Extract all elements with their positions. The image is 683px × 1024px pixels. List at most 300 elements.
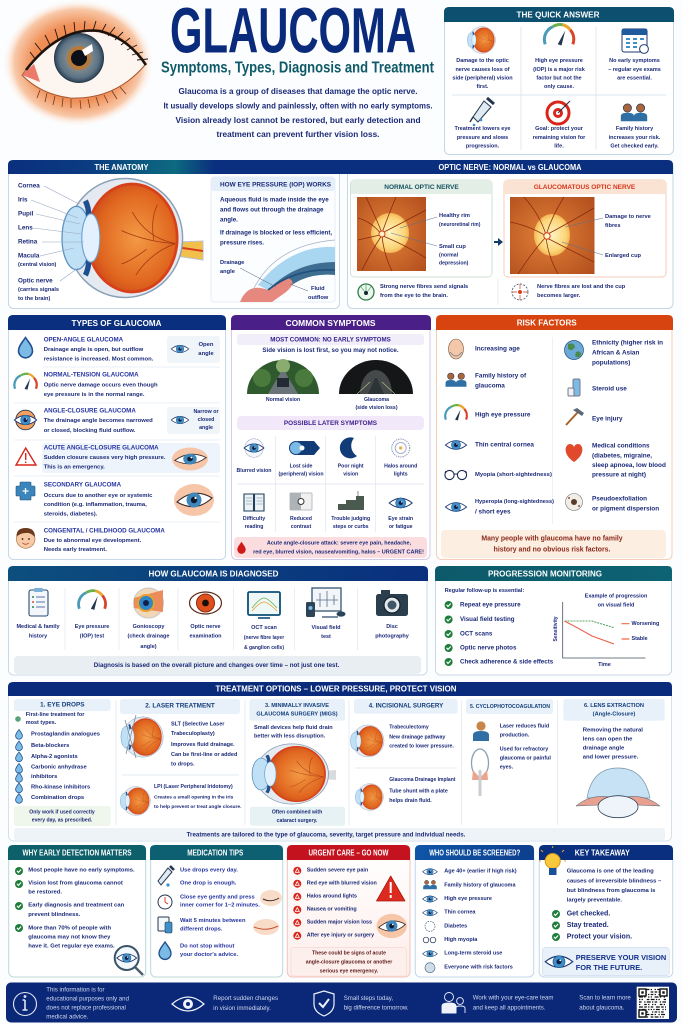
fundus photo: glaucoma — [510, 197, 594, 274]
icon: eye cross-section — [467, 27, 495, 53]
icon: dropper — [158, 866, 174, 887]
type: angle-closure: closed — [198, 417, 214, 423]
icon: medical history clipboard — [29, 588, 48, 616]
icon: lower eyelid — [253, 919, 279, 935]
treatment 3: MIGS: Often combined with — [272, 810, 322, 816]
treatment 1: eye drops: Alpha-2 agonists — [31, 754, 78, 760]
anatomy labels: (central vision) — [18, 262, 57, 268]
treatment 2: laser treatment: LPI (Laser Peripheral Iridotomy) — [154, 784, 233, 790]
symptom: blurred vision — [237, 439, 271, 474]
panel: why early detection matters: Early diagnosis and treatment can — [28, 903, 125, 909]
type: angle-closure: or closed, blocking fluid outflow. — [44, 428, 136, 434]
icon: eye outline — [172, 997, 204, 1011]
callout: preserve your vision: FOR THE FUTURE. — [576, 963, 642, 972]
panel: glaucomatous optic nerve: Enlarged cup — [605, 253, 642, 259]
panel: types of glaucoma: TYPES OF GLAUCOMA — [72, 318, 162, 328]
line chart: visual field progression: on visual field — [598, 603, 634, 609]
panel: medication tips: MEDICATION TIPS — [187, 848, 243, 858]
risk: high pressure: High eye pressure — [475, 412, 531, 418]
panel: key takeaway: largely preventable. — [567, 898, 622, 904]
panel: normal optic nerve: NORMAL OPTIC NERVE — [384, 184, 459, 191]
icon: family group — [621, 104, 647, 121]
footer disclaimer — [46, 986, 129, 1020]
footer disclaimer: does not replace professional — [46, 1004, 126, 1012]
panel: medication tips: Close eye gently and press — [180, 894, 255, 900]
optic nerve captions: Strong nerve fibres send signals — [380, 284, 468, 290]
footer report text: in vision immediately. — [213, 1005, 271, 1012]
footer small steps text: Small steps today, — [344, 995, 393, 1002]
quick answer text: bottom row: Treatment lowers eye — [455, 126, 510, 132]
treatment 1: eye drops: Only work if used correctly — [29, 809, 95, 815]
symptom: reduced contrast — [290, 493, 312, 530]
type: open-angle: Open — [198, 342, 214, 348]
risk: age — [448, 339, 520, 359]
treatment 4: incisional surgery: Trabeculectomy — [389, 724, 429, 730]
risk: high pressure — [445, 405, 531, 421]
symptom: lost side vision: (peripheral) vision — [279, 472, 323, 478]
symptom: poor night vision: vision — [343, 472, 358, 478]
optic nerve captions: becomes larger. — [537, 293, 581, 299]
risk: ethnicity — [564, 340, 663, 366]
treatment note — [14, 828, 665, 841]
type: secondary: steroids, diabetes). — [44, 512, 98, 518]
intro text: It usually develops slowly and painlessly, often with no early symptoms. — [164, 100, 432, 110]
panel: who should be screened: Age 40+ (earlier if high risk) — [444, 869, 517, 875]
icon: red eye — [376, 914, 407, 938]
quick answer text: bottom row: Goal: protect your — [535, 126, 584, 132]
treatment 2: laser treatment: to drops. — [171, 762, 195, 768]
type: acute angle-closure: ACUTE ANGLE-CLOSURE GLAUCOMA — [44, 444, 159, 452]
diagnosis labels: (check drainage — [128, 634, 169, 640]
panel: the quick answer: THE QUICK ANSWER — [516, 10, 600, 20]
risk: medical conditions: pressure at night) — [592, 472, 646, 478]
intro text: treatment can prevent further vision loss. — [216, 129, 380, 139]
symptom: halos: Halos around — [384, 464, 417, 470]
treatment 5: cyclophotocoagulation: 5. CYCLOPHOTOCOAGULATION — [470, 704, 550, 710]
anatomy labels: Macula — [18, 252, 40, 260]
treatment 1: eye drops: inhibitors — [31, 774, 57, 780]
treatment 4: incisional surgery: Tube shunt with a plate — [389, 789, 448, 795]
panel: why early detection matters: Vision lost from glaucoma cannot — [28, 881, 123, 887]
highlight: acute entry — [42, 443, 220, 473]
treatment 1: eye drops: Beta-blockers — [31, 743, 69, 749]
quick answer text: top row: – regular eye exams — [608, 67, 661, 73]
footer scan text: about glaucoma. — [579, 1004, 625, 1012]
type: normal-tension: eye pressure is in the normal range. — [44, 392, 145, 398]
checklist: Optic nerve photos — [460, 644, 517, 652]
panel: progression monitoring — [435, 566, 672, 675]
treatment note: Treatments are tailored to the type of glaucoma, severity, target pressure and individual needs. — [187, 832, 466, 838]
panel: medication tips: One drop is enough. — [180, 881, 237, 887]
treatment 5: cyclophotocoagulation: production. — [500, 732, 530, 738]
treatment 3: MIGS: Small devices help fluid drain — [254, 725, 333, 731]
panel: key takeaway: Stay treated. — [567, 922, 609, 929]
panel: common symptoms — [231, 315, 431, 560]
treatment 2: laser treatment — [120, 699, 242, 815]
icon: information — [14, 992, 36, 1016]
checklist: OCT scans — [460, 630, 493, 638]
icon: eye-care team — [442, 992, 465, 1013]
panel: how eye pressure works: Fluid — [311, 286, 325, 292]
type: acute angle-closure: Sudden closure causes very high pressure. — [44, 455, 166, 461]
type: open-angle: resistance is increased. Most common. — [44, 356, 154, 362]
icon: drop — [159, 942, 171, 959]
risk: ethnicity: African & Asian — [592, 350, 639, 356]
footer team text: Work with your eye-care team — [473, 994, 554, 1002]
panel: common symptoms: Side vision is lost first, so you may not notice. — [262, 347, 399, 354]
icon: camera — [376, 590, 408, 616]
risk: hyperopia — [445, 499, 554, 516]
callout: urgent note: serious eye emergency. — [320, 968, 379, 974]
type: normal-tension — [14, 372, 158, 398]
quick answer text: top row: nerve causes loss of — [455, 67, 510, 73]
diagnosis labels: Visual field — [312, 625, 340, 631]
footer bar — [6, 982, 677, 1022]
quick answer text: top row: first. — [477, 84, 489, 90]
treatment 4: incisional surgery: 4. INCISIONAL SURGERY — [369, 702, 444, 710]
type: open-angle: Drainage angle is open, but outflow — [44, 347, 144, 353]
risk: pseudoexfoliation: or pigment dispersion — [592, 506, 659, 512]
quick answer text: top row: factor but not the — [536, 76, 582, 82]
icon: OCT scan — [248, 592, 280, 618]
treatment 1: eye drops: Combination drops — [31, 795, 84, 801]
symptom: trouble judging steps: Trouble judging — [331, 516, 370, 522]
risk: thin cornea — [445, 440, 534, 450]
panel: normal optic nerve: (neuroretinal rim) — [439, 222, 481, 228]
icon: optic nerve examination — [190, 592, 222, 614]
panel: key takeaway — [539, 845, 673, 977]
type: acute angle-closure: This is an emergency. — [44, 464, 105, 470]
diagnosis labels: angle) — [140, 644, 157, 650]
icon: clock — [158, 895, 172, 909]
panel: who should be screened: WHO SHOULD BE SCREENED? — [429, 848, 520, 858]
panel: anatomy frame and heading: THE ANATOMY — [94, 162, 149, 172]
quick answer text: top row: are essential. — [617, 76, 652, 82]
panel: how eye pressure works: angle. — [220, 216, 238, 224]
type: secondary — [16, 482, 214, 518]
icon: shield — [314, 991, 334, 1016]
anatomy labels: Retina — [18, 238, 38, 246]
panel: who should be screened — [415, 845, 534, 977]
symptom: halos — [384, 439, 417, 478]
anatomy labels: (carries signals — [18, 287, 59, 293]
treatment 1: eye drops: Carbonic anhydrase — [31, 765, 88, 771]
callout: urgent note: angle-closure glaucoma or another — [306, 959, 392, 965]
risk: ethnicity: populations) — [592, 360, 630, 366]
risk: steroid use: Steroid use — [592, 386, 627, 392]
panel: glaucomatous optic nerve: fibres — [605, 223, 620, 229]
icon: magnifier — [115, 946, 143, 975]
risk: ethnicity: Ethnicity (higher risk in — [592, 340, 663, 346]
panel: normal optic nerve: Healthy rim — [439, 213, 470, 219]
treatment 1: eye drops: 1. EYE DROPS — [40, 702, 85, 708]
footer small steps text — [344, 995, 409, 1012]
panel: medication tips: inner corner for 1–2 minutes. — [180, 903, 260, 909]
quick answer text: top row: (IOP) is a major risk — [533, 67, 586, 73]
treatment 3: MIGS — [249, 699, 345, 826]
type: angle-closure: ANGLE-CLOSURE GLAUCOMA — [44, 408, 136, 414]
panel: common symptoms: (side vision loss) — [355, 405, 398, 411]
callout: diagnosis summary — [14, 656, 421, 674]
panel: key takeaway: Glaucoma is one of the leading — [567, 868, 654, 874]
type: secondary: SECONDARY GLAUCOMA — [44, 482, 122, 488]
anatomy labels: Cornea — [18, 182, 40, 190]
panel: normal optic nerve: depression) — [439, 260, 469, 266]
optic nerve captions: from the eye to the brain. — [380, 293, 448, 299]
panel: how glaucoma is diagnosed: HOW GLAUCOMA IS DIAGNOSED — [148, 568, 278, 578]
panel: why early detection matters: have it. Get regular eye exams. — [28, 944, 115, 950]
treatment 5: cyclophotocoagulation: eyes. — [500, 765, 514, 771]
type: angle-closure — [14, 407, 220, 434]
panel: urgent care: Sudden severe eye pain — [307, 868, 368, 874]
type: acute angle-closure — [16, 444, 208, 471]
treatment 3: MIGS: GLAUCOMA SURGERY (MIGS) — [256, 712, 338, 718]
risk: family history — [446, 372, 527, 390]
quick answer text: bottom row: life. — [554, 144, 564, 150]
symptom: difficulty reading — [243, 494, 265, 530]
risk: eye injury — [566, 408, 623, 425]
treatment 2: laser treatment: to help prevent or treat angle closure. — [154, 804, 242, 810]
treatment 6: lens extraction — [563, 699, 665, 818]
panel: why early detection matters — [8, 845, 146, 977]
type: congenital — [16, 528, 165, 553]
treatment 4: incisional surgery: created to lower pressure. — [389, 743, 454, 749]
risk: family history: Family history of — [475, 372, 527, 380]
panel: urgent care: Sudden major vision loss — [307, 920, 372, 926]
panel: urgent care — [287, 845, 410, 977]
panel: urgent care: Red eye with blurred vision — [307, 881, 377, 887]
quick answer text: bottom row: remaining vision for — [533, 135, 586, 141]
anatomy labels: to the brain) — [18, 296, 50, 302]
icon: light bulb — [539, 846, 566, 875]
footer report text: Report sudden changes — [213, 995, 278, 1002]
panel: common symptoms: POSSIBLE LATER SYMPTOMS — [284, 420, 378, 427]
treatment 5: cyclophotocoagulation: Used for refractory — [500, 746, 548, 752]
risk: medical conditions: Medical conditions — [592, 442, 650, 450]
anatomy labels — [18, 182, 84, 302]
callout: acute attack — [234, 537, 427, 558]
panel: medication tips: Wait 5 minutes between — [180, 918, 246, 924]
type: open-angle: angle — [198, 351, 214, 357]
diagnosis labels: (IOP) test — [80, 634, 104, 640]
symptom: reduced contrast: Reduced — [290, 516, 312, 522]
quick answer text: bottom row — [455, 126, 661, 150]
diagnosis labels: test — [321, 634, 331, 640]
treatment 4: incisional surgery — [350, 699, 458, 810]
line chart: visual field progression: Example of progression — [585, 594, 648, 600]
diagnosis labels: Optic nerve — [190, 624, 221, 630]
diagnosis labels — [16, 624, 410, 651]
panel: anatomy frame and heading: OPTIC NERVE: NORMAL vs GLAUCOMA — [438, 162, 582, 172]
vision dome: glaucoma — [339, 360, 413, 394]
type: congenital: Due to abnormal eye development. — [44, 538, 142, 544]
risk: eye injury: Eye injury — [592, 416, 623, 422]
footer scan text — [579, 994, 631, 1012]
treatment 3: MIGS: cataract surgery. — [277, 818, 318, 824]
panel: who should be screened: High myopia — [444, 937, 478, 943]
symptom: lost side vision — [279, 441, 323, 478]
panel: glaucomatous optic nerve: Damage to nerve — [605, 214, 651, 220]
line chart: visual field progression: Sensitivity — [553, 616, 559, 642]
panel: common symptoms: Glaucoma — [364, 397, 389, 403]
footer disclaimer: medical advice. — [46, 1014, 89, 1020]
line chart: visual field progression — [553, 594, 659, 668]
panel: urgent care: After eye injury or surgery — [307, 933, 374, 939]
treatment 1: eye drops: most types. — [26, 720, 57, 726]
treatment 2: laser treatment: Trabeculoplasty) — [171, 731, 215, 737]
callout: diagnosis summary: Diagnosis is based on the overall picture and changes over time – not just one test. — [94, 662, 340, 669]
callout: no obvious risk factors: history and no obvious risk factors. — [494, 546, 610, 554]
panel: key takeaway: causes of irreversible blindness – — [567, 878, 662, 884]
quick answer text: bottom row: Family history — [616, 126, 654, 132]
panel: key takeaway: Protect your vision. — [567, 934, 632, 940]
treatment 5: cyclophotocoagulation: glaucoma or painful — [500, 756, 551, 762]
symptom: difficulty reading: Difficulty — [243, 516, 265, 522]
panel: treatment options — [8, 682, 672, 841]
type: normal-tension: NORMAL-TENSION GLAUCOMA — [44, 372, 139, 378]
checklist — [445, 601, 554, 666]
panel: types of glaucoma — [8, 315, 226, 560]
risk: medical conditions — [566, 442, 666, 478]
panel: key takeaway: KEY TAKEAWAY — [575, 848, 630, 858]
risk: medical conditions: (diabetes, migraine, — [592, 452, 652, 460]
intro text: Glaucoma is a group of diseases that damage the optic nerve. — [178, 86, 418, 96]
icon: strong nerve fibres — [358, 284, 374, 300]
intro text: Vision already lost cannot be restored, but early detection and — [176, 115, 420, 125]
treatment 1: eye drops: every day, as prescribed. — [32, 818, 93, 824]
panel: risk factors — [436, 315, 673, 560]
diagnosis labels: Gonioscopy — [133, 624, 165, 630]
symptom: eye strain: or fatigue — [389, 524, 413, 530]
panel: how eye pressure works: pressure rises. — [220, 240, 264, 246]
symptom: poor night vision — [338, 437, 364, 478]
panel: how eye pressure works: and flows out through the drainage — [220, 206, 324, 214]
panel: glaucomatous optic nerve: GLAUCOMATOUS OPTIC NERVE — [534, 184, 636, 191]
symptom: eye strain: Eye strain — [388, 516, 413, 522]
intro text — [164, 86, 432, 139]
symptom: reduced contrast: contrast — [291, 524, 312, 530]
quick answer text: top row: Damage to the optic — [456, 58, 509, 64]
line chart: visual field progression: Stable — [632, 636, 648, 642]
optic nerve captions — [358, 279, 626, 305]
panel: glaucomatous optic nerve — [504, 180, 666, 277]
symptom: lost side vision: Lost side — [290, 464, 312, 470]
diagnosis labels: examination — [189, 634, 222, 640]
risk: hyperopia: Hyperopia (long-sightedness) — [475, 499, 554, 505]
treatment 6: lens extraction: lens can open the — [583, 737, 633, 743]
panel: why early detection matters: prevent blindness. — [28, 912, 81, 918]
panel: medication tips: Do not stop without — [180, 943, 234, 949]
panel: who should be screened: Long-term steroid use — [444, 951, 502, 957]
symptom: trouble judging steps — [331, 491, 370, 530]
line chart: visual field progression: Worsening — [632, 621, 659, 627]
type: open-angle: OPEN-ANGLE GLAUCOMA — [44, 336, 124, 344]
treatment 6: lens extraction: Removing the natural — [583, 728, 643, 734]
diagnosis labels: photography — [375, 634, 410, 640]
diagnosis labels: Disc — [386, 624, 398, 630]
panel: urgent care: URGENT CARE – GO NOW — [308, 848, 389, 858]
type: congenital: CONGENITAL / CHILDHOOD GLAUCOMA — [44, 528, 165, 534]
type: secondary: Occurs due to another eye or systemic — [44, 493, 153, 499]
diagnosis labels: history — [29, 634, 48, 640]
treatment 1: eye drops: Rho-kinase inhibitors — [31, 785, 90, 791]
panel: how eye pressure works: If drainage is blocked or less efficient, — [220, 230, 332, 236]
icon: eye pressure test — [79, 591, 106, 610]
checklist: Visual field testing — [460, 616, 515, 623]
checklist: Check adherence & side effects — [460, 658, 554, 666]
arrow: normal to glaucoma — [494, 238, 503, 246]
quick answer text: bottom row: pressure and slows — [457, 135, 508, 141]
risk: pseudoexfoliation: Pseudoexfoliation — [592, 496, 647, 502]
treatment 4: incisional surgery: New drainage pathway — [389, 735, 445, 741]
panel: how eye pressure works — [211, 177, 335, 302]
risk: myopia — [445, 470, 552, 480]
panel: medication tips: Use drops every day. — [180, 868, 238, 874]
quick answer text: bottom row: progression. — [466, 144, 500, 150]
callout: acute attack: Acute angle-closure attack: severe eye pain, headache, — [267, 541, 412, 547]
callout: no obvious risk factors — [441, 530, 666, 558]
panel: how eye pressure works: Aqueous fluid is made inside the eye — [220, 196, 329, 204]
callout: urgent note — [291, 947, 407, 976]
fundus photo: normal — [357, 197, 426, 271]
treatment 5: cyclophotocoagulation: Laser reduces fluid — [500, 723, 549, 729]
callout: acute attack: red eye, blurred vision, nausea/vomiting, halos – URGENT CARE! — [253, 550, 424, 556]
type: open-angle — [18, 336, 220, 363]
icon: closed eye — [260, 890, 282, 906]
icon: bottle and calendar — [158, 917, 172, 933]
vision dome: normal — [247, 359, 319, 394]
anatomy labels: Optic nerve — [18, 278, 53, 284]
icon: lost nerve fibres — [512, 284, 528, 300]
panel: who should be screened: Diabetes — [444, 923, 467, 929]
quick answer text: top row: No early symptoms — [609, 58, 660, 64]
panel: progression monitoring: PROGRESSION MONITORING — [488, 568, 602, 578]
panel: why early detection matters: be restored. — [28, 890, 62, 896]
anatomy labels: Pupil — [18, 210, 34, 218]
symptom: difficulty reading: reading — [245, 524, 263, 530]
treatment 1: eye drops: Prostaglandin analogues — [31, 732, 100, 738]
panel: how eye pressure works: angle — [220, 269, 235, 275]
panel: how eye pressure works: HOW EYE PRESSURE (IOP) WORKS — [220, 182, 332, 188]
risk: pseudoexfoliation — [566, 494, 659, 512]
diagnosis labels: (nerve fibre layer — [244, 635, 284, 641]
type: normal-tension: Optic nerve damage occurs even though — [44, 382, 158, 388]
panel: the quick answer — [444, 7, 674, 154]
footer disclaimer: This information is for — [46, 986, 105, 994]
anatomy labels: Lens — [18, 224, 33, 232]
subtitle: Symptoms, Types, Diagnosis and Treatment — [161, 60, 434, 76]
panel: medication tips: different drops. — [180, 927, 223, 933]
risk: family history: glaucoma — [475, 382, 505, 390]
footer team text — [473, 994, 554, 1012]
risk: hyperopia: / short eyes — [475, 508, 511, 516]
treatment 3: MIGS: better with less disruption. — [254, 734, 326, 740]
icon: pressure gauge — [544, 25, 574, 46]
footer scan text: Scan to learn more — [579, 994, 631, 1002]
type: angle-closure: angle — [199, 425, 213, 431]
quick answer text: bottom row: Get checked early. — [610, 144, 659, 150]
optic nerve captions: Nerve fibres are lost and the cup — [537, 284, 626, 290]
panel: who should be screened: Family history of glaucoma — [444, 883, 516, 889]
diagnosis labels: OCT scan — [251, 625, 277, 631]
risk: steroid use — [568, 379, 627, 396]
panel: normal optic nerve — [350, 180, 492, 277]
treatment 2: laser treatment: 2. LASER TREATMENT — [145, 702, 215, 710]
risk: medical conditions: sleep apnoea, low blood — [592, 462, 666, 469]
panel: common symptoms: Normal vision — [266, 397, 300, 403]
panel: how eye pressure works: Drainage — [220, 260, 244, 266]
panel: treatment options: TREATMENT OPTIONS – LOWER PRESSURE, PROTECT VISION — [216, 684, 456, 694]
